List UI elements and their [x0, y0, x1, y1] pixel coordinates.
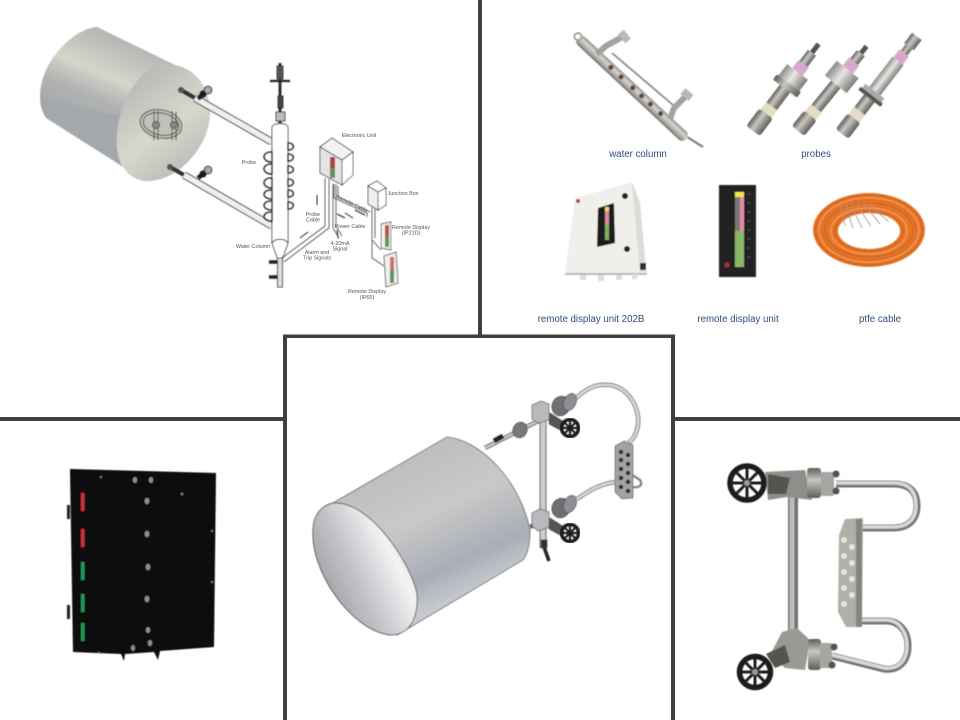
upper handwheel: [730, 466, 764, 500]
schematic labels: Remote Cable: [335, 194, 368, 214]
indicator lights: [81, 493, 84, 641]
caption: remote display unit 202B: remote display unit 202B: [538, 314, 644, 325]
schematic labels: Signal: [332, 246, 348, 252]
manifold: [838, 518, 863, 627]
electronic unit: [320, 138, 353, 185]
schematic labels: Alarm and: [305, 250, 329, 256]
caption: probes: probes: [801, 149, 831, 160]
schematic labels: Remote Display: [348, 289, 386, 295]
photo: remote display unit 202B: [565, 182, 647, 281]
caption: ptfe cable: ptfe cable: [859, 314, 901, 325]
schematic labels: Water Column: [236, 244, 270, 250]
panel: black indicator enclosure: [67, 469, 216, 661]
schematic labels: 4-20mA: [331, 241, 350, 247]
gauge pipework: [485, 385, 641, 561]
schematic labels: Probe: [306, 212, 320, 218]
junction box: [368, 181, 386, 210]
schematic labels: Junction Box: [388, 191, 419, 197]
schematic labels: Cable: [306, 218, 320, 224]
manway: [138, 106, 184, 142]
caption: water column: water column: [608, 149, 667, 160]
schematic labels: [236, 133, 430, 301]
tank drum: [40, 27, 210, 181]
schematic labels: (IP21D): [402, 230, 420, 236]
schematic labels: Remote Display: [392, 225, 430, 231]
schematic labels: (IP65): [360, 295, 375, 301]
tubing: [792, 483, 917, 669]
enclosure body: [70, 469, 216, 661]
remote display IP65: [384, 252, 398, 287]
bolts: [98, 476, 213, 654]
photo: remote display unit: [719, 185, 756, 277]
panel: tank and level gauge schematic: [40, 27, 430, 301]
lower handwheel: [561, 524, 579, 542]
schematic labels: Power Cable: [335, 224, 365, 230]
upper connecting pipe: [178, 86, 272, 142]
panel: tank with level gauge assembly: [313, 385, 641, 635]
photo: water column: [571, 31, 703, 147]
gauge blocks and flanges: [510, 391, 579, 548]
water column with probes: [264, 63, 293, 287]
schematic labels: Electronic Unit: [342, 133, 377, 139]
cabling with arrows: [282, 178, 384, 266]
panel: component photos: [538, 28, 928, 325]
schematic labels: Probe: [242, 160, 256, 166]
schematic labels: Trip Signals: [303, 256, 331, 262]
manifold: [615, 441, 633, 499]
photo: ptfe cable coil: [813, 193, 925, 267]
lower connecting pipe: [167, 164, 272, 226]
caption: remote display unit: remote display unit: [697, 314, 779, 325]
lower handwheel: [739, 656, 771, 688]
photo: probes: [741, 28, 928, 143]
remote display IP21D: [381, 222, 391, 250]
upper valve body: [765, 468, 840, 500]
panel: stainless gauge assembly photo: [730, 466, 917, 688]
lower valve body: [766, 628, 838, 670]
horizontal drum: [313, 437, 530, 635]
upper handwheel: [561, 419, 579, 437]
side brackets: [67, 505, 70, 619]
